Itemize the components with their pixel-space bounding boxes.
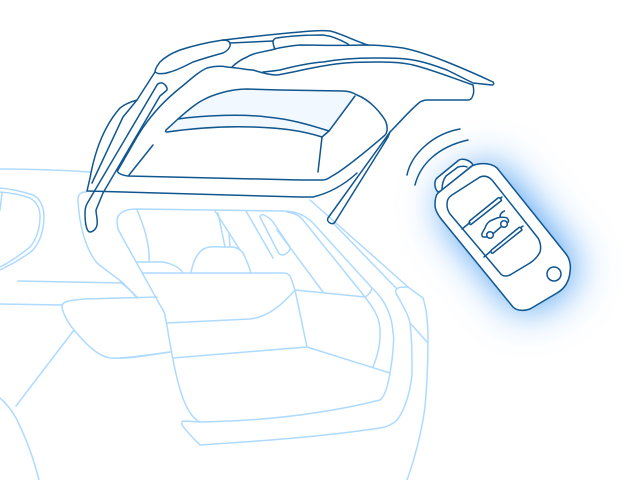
key ring loop	[435, 159, 473, 192]
trunk interior	[117, 209, 394, 422]
signal waves	[407, 129, 468, 185]
left gas strut	[85, 83, 167, 232]
car icon	[482, 211, 509, 238]
key button panel	[447, 176, 541, 276]
tailgate window	[166, 89, 355, 137]
tailgate	[85, 31, 494, 232]
key body	[435, 164, 570, 310]
key button dividers	[462, 197, 523, 257]
key button circle	[547, 267, 561, 281]
key fob glow	[444, 166, 574, 310]
car body outline	[0, 169, 428, 480]
right gas strut	[328, 132, 390, 224]
tailgate frame lines	[87, 62, 474, 197]
spoiler	[155, 31, 494, 85]
key fob	[435, 159, 570, 310]
